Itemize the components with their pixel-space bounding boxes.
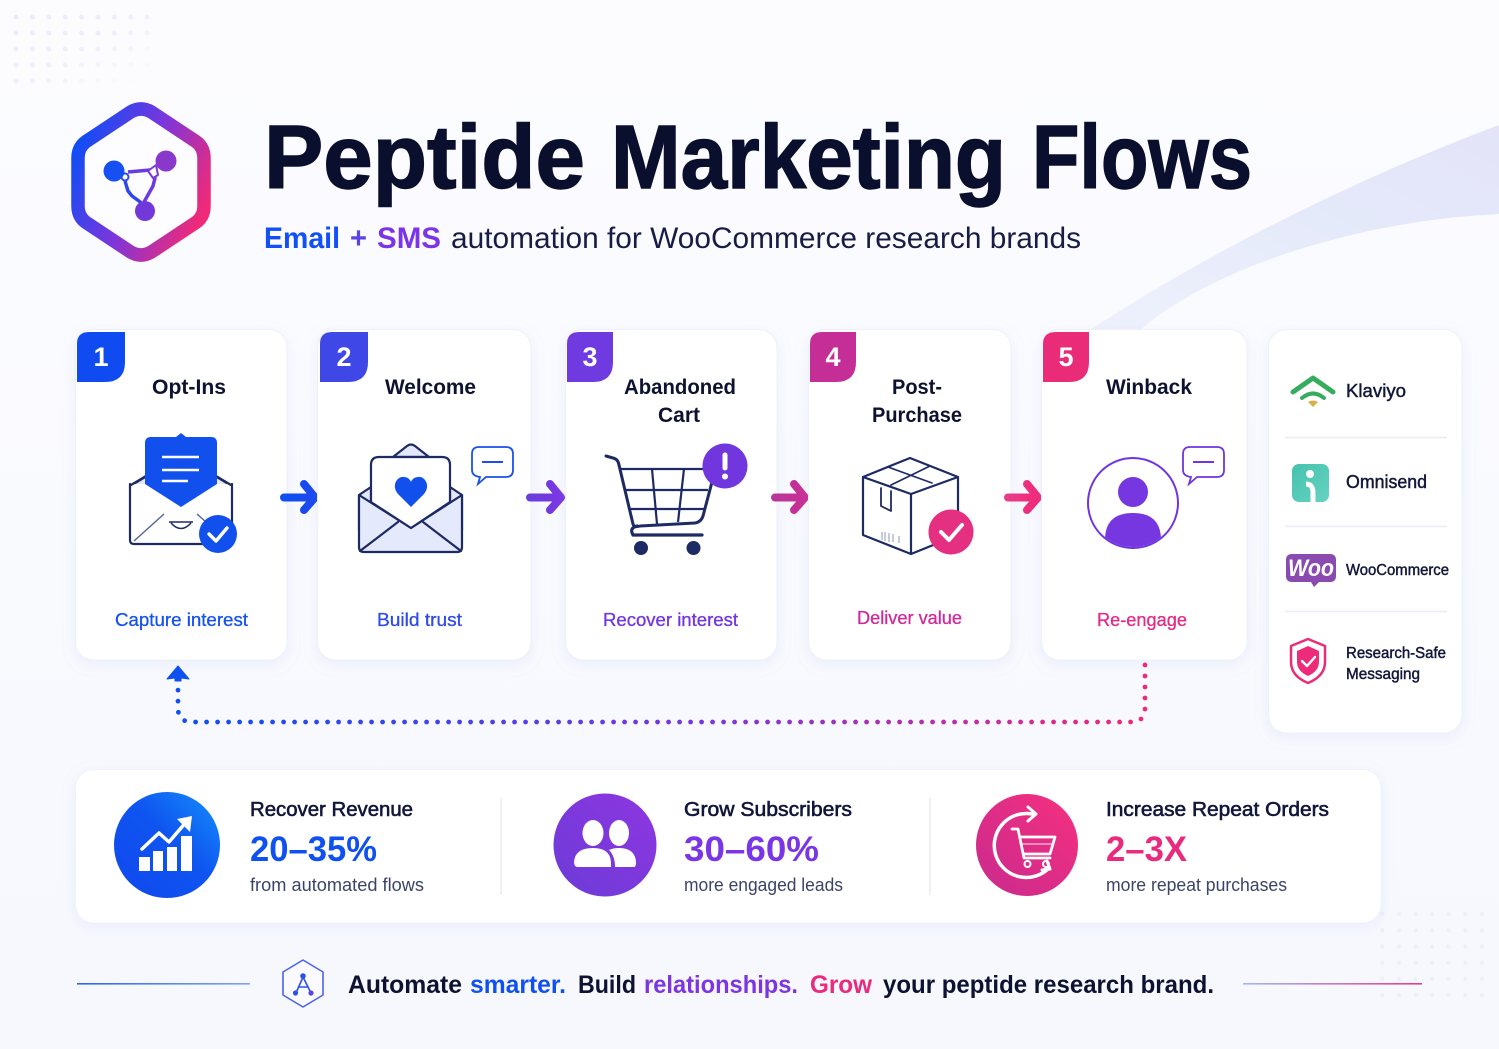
stat: grow subscribers: more engaged leads — [684, 875, 843, 895]
title — [264, 108, 1252, 208]
footer rule right — [1243, 983, 1422, 985]
badge 1: 1 — [93, 342, 109, 372]
badge 4 — [810, 332, 856, 382]
footer tagline — [348, 971, 1214, 999]
panel: step 5 winback — [1042, 330, 1247, 660]
stat: recover revenue — [250, 799, 424, 895]
subtitle: SMS — [377, 222, 441, 255]
icon: shopping cart alert — [606, 444, 748, 555]
caption: deliver value: Deliver value — [857, 608, 962, 628]
stat: increase repeat orders — [1106, 799, 1329, 895]
title: Flows — [1032, 108, 1252, 208]
panel: step 4 post-purchase — [808, 330, 1011, 660]
stat: increase repeat orders: 2–3X — [1106, 830, 1188, 869]
icon: omnisend — [1292, 464, 1329, 502]
icon: subscribers — [554, 794, 656, 896]
badge 2: 2 — [336, 342, 352, 372]
footer tagline: Build — [578, 971, 636, 999]
badge 2 — [320, 332, 368, 382]
icon: repeat orders cart — [976, 794, 1078, 896]
title: Marketing — [611, 108, 1006, 208]
caption: recover interest: Recover interest — [603, 610, 738, 630]
footer tagline: smarter. — [470, 971, 566, 999]
icon: research-safe shield — [1291, 639, 1325, 683]
stat: increase repeat orders: Increase Repeat Orders — [1106, 799, 1329, 821]
caption: build trust: Build trust — [377, 610, 462, 630]
arrow 1 — [284, 484, 315, 510]
logo: hexagon molecule — [78, 109, 204, 255]
footer tagline: relationships. — [644, 971, 798, 999]
label: research-safe messaging: Research-Safe — [1346, 645, 1446, 662]
footer tagline: Grow — [810, 971, 873, 999]
panel: stats — [76, 770, 1381, 923]
heading: welcome: Welcome — [385, 376, 476, 399]
heading: abandoned cart: Abandoned — [624, 376, 736, 399]
icon: opt-in envelope — [130, 433, 237, 553]
stat: recover revenue: from automated flows — [250, 875, 424, 895]
icon: welcome envelope with heart — [359, 444, 513, 552]
label: woocommerce: WooCommerce — [1346, 562, 1449, 579]
heading: opt-ins: Opt-Ins — [152, 376, 226, 399]
badge 3: 3 — [582, 342, 598, 372]
subtitle: Email — [264, 222, 340, 255]
dotted loop arrow — [167, 665, 1145, 722]
heading: winback: Winback — [1106, 376, 1192, 399]
icon: klaviyo — [1293, 378, 1333, 407]
arrow 3 — [775, 484, 805, 510]
subtitle: automation for WooCommerce research brands — [451, 222, 1081, 255]
icon: woocommerce: Woo — [1288, 555, 1334, 582]
stat: grow subscribers — [684, 799, 852, 895]
footer tagline: Automate — [348, 971, 462, 999]
panel: integrations — [1268, 330, 1462, 733]
panel: step 2 welcome — [318, 330, 531, 660]
caption: capture interest: Capture interest — [115, 610, 248, 630]
label: omnisend: Omnisend — [1346, 472, 1427, 492]
badge 4: 4 — [825, 342, 841, 372]
badge 5 — [1043, 332, 1089, 382]
stat: grow subscribers: 30–60% — [684, 830, 819, 869]
caption: re-engage: Re-engage — [1097, 610, 1187, 630]
arrow 4 — [1008, 484, 1038, 510]
badge 5: 5 — [1058, 342, 1074, 372]
heading: post-purchase: Post- — [892, 376, 942, 399]
label: research-safe messaging: Messaging — [1346, 666, 1420, 683]
icon: package box — [863, 458, 974, 554]
label: research-safe messaging — [1346, 645, 1446, 683]
heading: post-purchase — [872, 376, 962, 427]
heading: post-purchase: Purchase — [872, 404, 962, 427]
subtitle: + — [350, 222, 367, 255]
panel: step 1 opt-ins — [76, 330, 287, 660]
heading: abandoned cart — [624, 376, 736, 427]
heading: abandoned cart: Cart — [658, 404, 700, 427]
stat: recover revenue: Recover Revenue — [250, 799, 413, 821]
icon: revenue chart — [114, 792, 220, 898]
stat: recover revenue: 20–35% — [250, 830, 377, 869]
footer tagline: your peptide research brand. — [883, 971, 1214, 999]
badge 1 — [77, 332, 125, 382]
icon: winback person — [1088, 447, 1224, 560]
arrow 2 — [530, 484, 561, 510]
stat: grow subscribers: Grow Subscribers — [684, 799, 852, 821]
footer rule left — [77, 983, 250, 985]
badge 3 — [567, 332, 613, 382]
panel: step 3 abandoned cart — [566, 330, 777, 660]
stat: increase repeat orders: more repeat purchases — [1106, 875, 1287, 895]
icon: footer hexagon — [283, 960, 323, 1007]
title: Peptide — [264, 108, 585, 208]
label: klaviyo: Klaviyo — [1346, 381, 1406, 401]
